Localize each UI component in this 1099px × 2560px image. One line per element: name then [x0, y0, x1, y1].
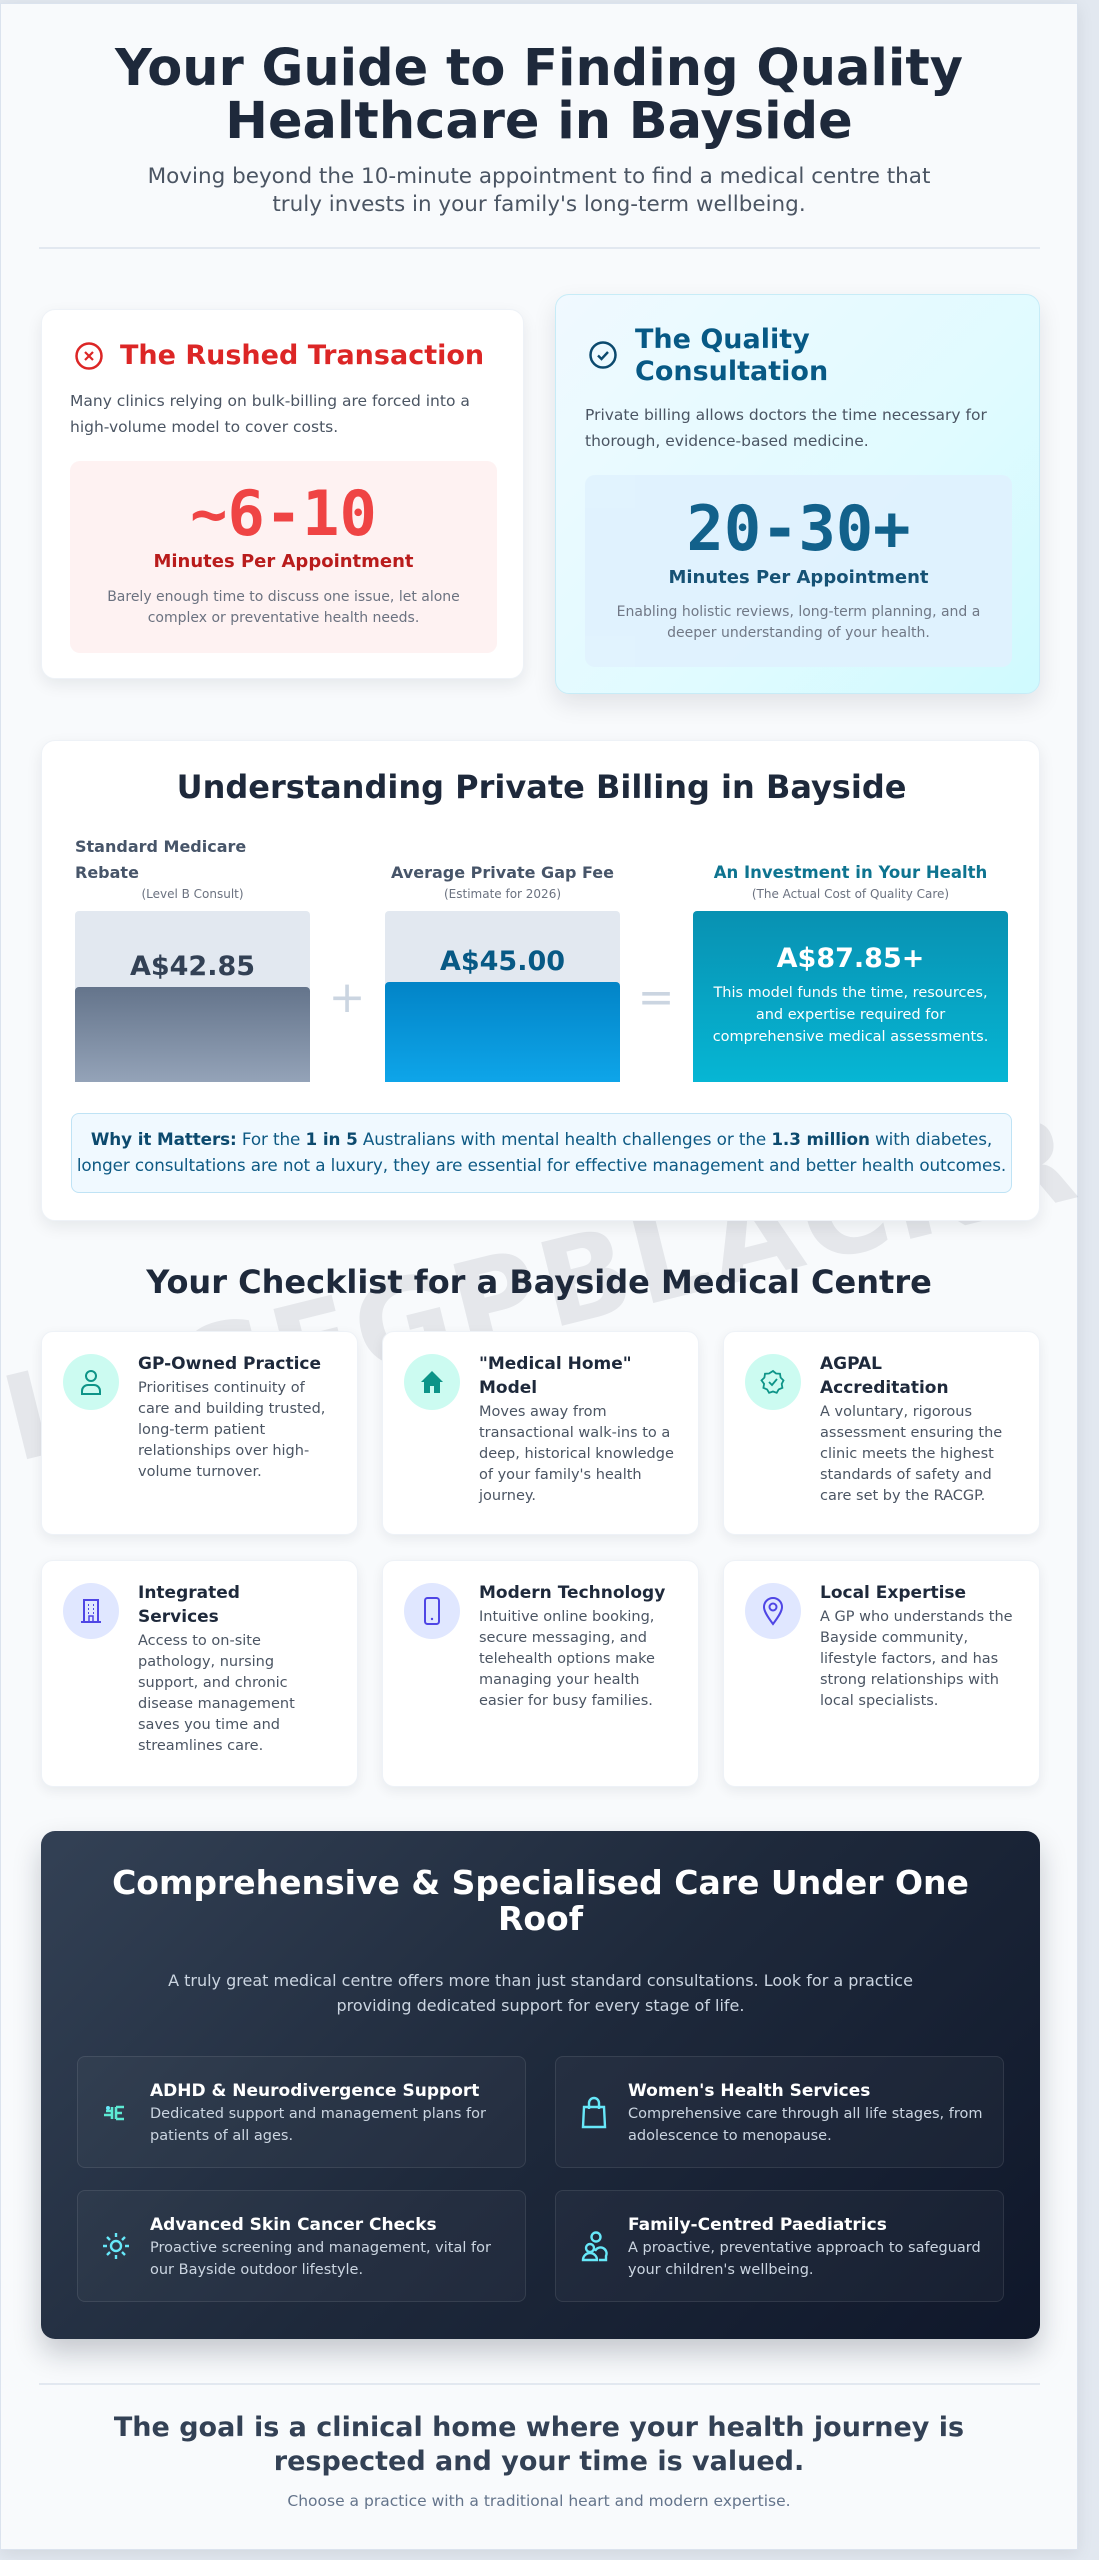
column: gap fee: (Estimate for 2026): [444, 887, 561, 901]
column: total: An Investment in Your Health: [714, 863, 987, 882]
service: women's health: Women's Health Services: [628, 2081, 870, 2101]
title: Healthcare in Bayside: [225, 92, 853, 151]
stat box: Minutes Per Appointment: [153, 551, 414, 572]
service: women's health: Comprehensive care through all life stages, from adolescence to menopause.: [628, 2106, 983, 2144]
icon: house: [404, 1354, 460, 1410]
closing statement: respected and your time is valued.: [274, 2446, 804, 2477]
title: Your Guide to Finding Quality: [115, 39, 963, 98]
column: total: (The Actual Cost of Quality Care): [752, 887, 949, 901]
card: medical home: [382, 1331, 699, 1535]
stat box: 20-30+: [687, 492, 910, 565]
icon: bag: [582, 2096, 606, 2128]
card: local expertise: Local Expertise: [820, 1583, 966, 1603]
card: AGPAL: AGPAL Accreditation: [820, 1354, 949, 1398]
closing statement: The goal is a clinical home where your health journey is: [114, 2412, 964, 2443]
callout: why it matters: Why it Matters: For the 1 in 5 Australians with mental health challenges or the 1.3 million with diabetes,: [91, 1129, 992, 1149]
card: GP-owned practice: [41, 1331, 358, 1535]
heading: Comprehensive & Specialised Care Under One Roof: [112, 1863, 969, 1938]
card: integrated services: Access to on-site pathology, nursing support, and chronic disease management saves you time and streamlines care.: [138, 1633, 295, 1754]
icon: building: [63, 1583, 119, 1639]
service: skin cancer: Proactive screening and management, vital for our Bayside outdoor lifestyle.: [150, 2240, 491, 2278]
service: women's health: [555, 2056, 1004, 2168]
service: skin cancer: Advanced Skin Cancer Checks: [150, 2215, 437, 2235]
service: paediatrics: [555, 2190, 1004, 2302]
column: medicare rebate: [75, 837, 310, 1082]
callout: why it matters: longer consultations are not a luxury, they are essential for effective management and better health outcomes.: [77, 1155, 1006, 1175]
card: modern technology: Intuitive online booking, secure messaging, and telehealth options make managing your health easier for busy families.: [479, 1609, 655, 1709]
panel: quality consultation: [555, 294, 1040, 694]
heading: [635, 324, 828, 387]
closing statement: [114, 2412, 964, 2477]
card: integrated services: [41, 1560, 358, 1787]
column: total: [693, 863, 1008, 1082]
card: AGPAL: A voluntary, rigorous assessment ensuring the clinic meets the highest standards of safety and care set by the RACGP.: [820, 1404, 1002, 1504]
card: AGPAL: [723, 1331, 1040, 1535]
card: modern technology: Modern Technology: [479, 1583, 665, 1603]
column: gap fee: [385, 863, 620, 1082]
heading: The Rushed Transaction: [120, 340, 484, 371]
text: Private billing allows doctors the time necessary for thorough, evidence-based medicine.: [585, 406, 987, 450]
stat box: Barely enough time to discuss one issue, let alone complex or preventative health needs.: [107, 589, 460, 626]
stat box: Minutes Per Appointment: [668, 567, 929, 588]
subtitle: Moving beyond the 10-minute appointment to find a medical centre that: [148, 164, 930, 189]
panel: specialised care: [41, 1831, 1040, 2339]
icon: x circle: [75, 342, 103, 370]
stat box: [585, 475, 1012, 667]
service: ADHD: [77, 2056, 526, 2168]
column: gap fee: A$45.00: [440, 946, 565, 977]
text: A truly great medical centre offers more than just standard consultations. Look for a practice providing dedicated support for every stage of life.: [168, 1971, 913, 2015]
column: medicare rebate: (Level B Consult): [141, 887, 244, 901]
icon: phone: [404, 1583, 460, 1639]
column: medicare rebate: A$42.85: [130, 951, 255, 982]
service: paediatrics: A proactive, preventative approach to safeguard your children's wellbeing.: [628, 2240, 981, 2278]
column: total: A$87.85+: [777, 943, 924, 974]
subtitle: truly invests in your family's long-term wellbeing.: [272, 192, 806, 217]
card: integrated services: Integrated Services: [138, 1583, 240, 1627]
icon: plus: +: [329, 972, 365, 1023]
callout: why it matters: [71, 1113, 1012, 1193]
panel: rushed transaction: [41, 309, 524, 679]
card: modern technology: [382, 1560, 699, 1787]
icon: badge check: [745, 1354, 801, 1410]
card: medical home: Moves away from transactional walk-ins to a deep, historical knowledge of your family's health journey.: [479, 1404, 674, 1504]
stat box: ~6-10: [190, 477, 377, 550]
service: skin cancer: [77, 2190, 526, 2302]
card: GP-owned practice: GP-Owned Practice: [138, 1354, 321, 1374]
heading: Consultation: [635, 356, 828, 387]
card: GP-owned practice: Prioritises continuity of care and building trusted, long-term patient relationships over high-volume turnover.: [138, 1380, 325, 1480]
icon: check circle: [589, 341, 617, 369]
icon: person: [63, 1354, 119, 1410]
service: ADHD: ADHD & Neurodivergence Support: [150, 2081, 479, 2101]
icon: brain: [104, 2106, 124, 2120]
subtitle: [148, 164, 930, 217]
column: gap fee: Average Private Gap Fee: [391, 863, 614, 882]
card: local expertise: A GP who understands the Bayside community, lifestyle factors, and has strong relationships with local specialists.: [820, 1609, 1013, 1709]
column: medicare rebate: Standard Medicare Rebate: [75, 837, 246, 882]
text: Many clinics relying on bulk-billing are forced into a high-volume model to cover costs.: [70, 392, 470, 436]
stat box: [70, 461, 497, 653]
service: ADHD: Dedicated support and management plans for patients of all ages.: [150, 2106, 486, 2144]
card: medical home: "Medical Home" Model: [479, 1354, 632, 1398]
title: [114, 39, 963, 151]
icon: map pin: [745, 1583, 801, 1639]
column: total: This model funds the time, resources, and expertise required for comprehensive medical assessments.: [713, 985, 988, 1045]
icon: sun: [103, 2233, 129, 2259]
stat box: Enabling holistic reviews, long-term planning, and a deeper understanding of your health.: [617, 604, 980, 641]
watermark: LAGEGPBLACKR: [0, 1089, 1091, 1489]
icon: family: [582, 2231, 608, 2262]
icon: equals: =: [638, 972, 674, 1023]
card: local expertise: [723, 1560, 1040, 1787]
panel: private billing: [41, 740, 1040, 1221]
heading: Understanding Private Billing in Bayside: [177, 768, 906, 806]
heading: The Quality: [635, 324, 810, 355]
heading: checklist: Your Checklist for a Bayside Medical Centre: [146, 1263, 932, 1301]
closing subtext: Choose a practice with a traditional heart and modern expertise.: [287, 2492, 791, 2510]
service: paediatrics: Family-Centred Paediatrics: [628, 2215, 887, 2235]
